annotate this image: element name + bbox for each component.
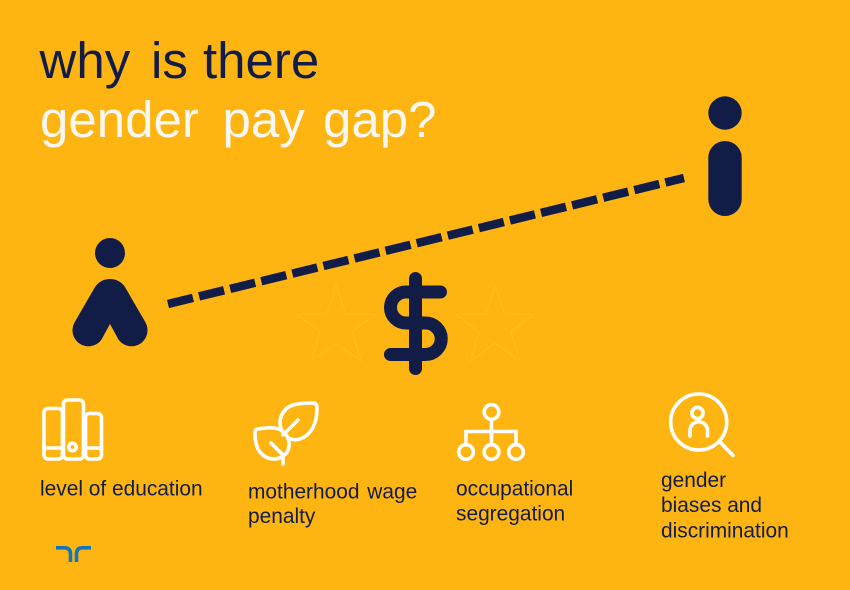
icon: short person bbox=[72, 238, 148, 346]
icon: left star bbox=[297, 286, 375, 361]
logo bbox=[56, 548, 91, 562]
label: occupational segregation: segregation bbox=[456, 502, 565, 526]
title bbox=[38, 32, 436, 148]
icon: dollar sign bbox=[390, 278, 441, 368]
label: level of education: level of education bbox=[40, 478, 203, 500]
item: occupational segregation bbox=[456, 405, 573, 526]
dashed gap line bbox=[168, 178, 684, 304]
label: gender biases and discrimination: gender bbox=[661, 469, 726, 492]
label: gender biases and discrimination: biases and bbox=[661, 494, 762, 517]
title line 1: why bbox=[38, 32, 131, 89]
icon: magnifier with person bbox=[671, 394, 733, 456]
title line 1: is bbox=[151, 32, 188, 89]
icon: tall person bbox=[708, 96, 742, 216]
title line 1: there bbox=[203, 32, 319, 89]
icon: org chart bbox=[459, 405, 523, 459]
title line 2: gender bbox=[40, 91, 199, 148]
label: gender biases and discrimination: discrimination bbox=[661, 520, 789, 542]
icon: right star bbox=[456, 286, 534, 361]
icon: leaves bbox=[255, 403, 317, 464]
item: level of education bbox=[40, 400, 203, 500]
icon: books bbox=[44, 400, 102, 459]
item: gender biases and discrimination bbox=[661, 394, 789, 542]
title line 2: pay bbox=[222, 91, 305, 148]
label: occupational segregation: occupational bbox=[456, 478, 573, 500]
item: motherhood wage penalty bbox=[248, 403, 417, 528]
label: motherhood wage penalty: penalty bbox=[248, 505, 316, 528]
title line 2: gap? bbox=[323, 91, 436, 148]
label: motherhood wage penalty: motherhood wage bbox=[248, 480, 417, 504]
